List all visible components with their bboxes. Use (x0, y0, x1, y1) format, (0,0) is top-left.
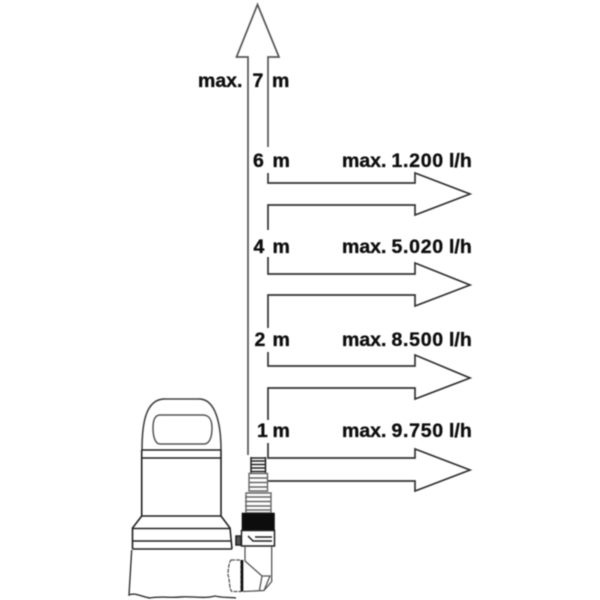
label: max. 7 m: 7 (252, 70, 263, 92)
arrow: vertical maximum height (236, 4, 279, 455)
hose fitting (228, 457, 274, 592)
label: max. 9.750 l/h: max. (342, 420, 386, 442)
label: 1 m: 1 (257, 420, 268, 442)
label: 1 m: m (272, 420, 290, 442)
black coupling (242, 514, 274, 530)
label: 2 m: 2 (254, 329, 266, 351)
outlet thick band (241, 560, 243, 592)
label: max. 7 m: m (272, 70, 289, 92)
label: max. 5.020 l/h: l/h (449, 236, 472, 258)
label: 2 m: m (272, 329, 290, 351)
icon: submersible pump (129, 399, 274, 598)
diagram contents (129, 4, 472, 598)
white collar (242, 530, 274, 546)
pump lower flange (132, 516, 232, 549)
label: max. 8.500 l/h: l/h (449, 329, 472, 351)
label: max. 8.500 l/h: 8.500 (392, 329, 444, 351)
ribbed nozzle (251, 457, 266, 473)
middle thread (249, 474, 268, 491)
label: 4 m: 4 (254, 236, 264, 258)
label: max. 8.500 l/h: max. (342, 329, 386, 351)
arrow: flow at 2 m (268, 352, 470, 420)
arrow: flow at 6 m (268, 173, 470, 230)
label: 6 m: 6 (253, 150, 264, 172)
label: max. 1.200 l/h: 1.200 (392, 150, 444, 172)
label: 6 m: m (272, 150, 290, 172)
label: max. 1.200 l/h: max. (342, 150, 386, 172)
pump base (129, 550, 236, 598)
label: max. 5.020 l/h: max. (342, 236, 386, 258)
label: max. 1.200 l/h: l/h (449, 150, 472, 172)
clip (236, 536, 241, 545)
outlet port (228, 560, 241, 592)
lower thread (245, 493, 271, 513)
label: max. 9.750 l/h: 9.750 (392, 420, 444, 442)
pump handle (142, 399, 221, 450)
label: max. 5.020 l/h: 5.020 (392, 236, 444, 258)
label: max. 9.750 l/h: l/h (449, 420, 472, 442)
arrow: flow at 1 m (268, 443, 470, 491)
label: max. 7 m: max. (198, 70, 242, 92)
label: 4 m: m (272, 236, 290, 258)
handle window (153, 415, 212, 444)
pump body (142, 450, 221, 516)
elbow (243, 546, 272, 592)
arrow: flow at 4 m (268, 257, 470, 328)
